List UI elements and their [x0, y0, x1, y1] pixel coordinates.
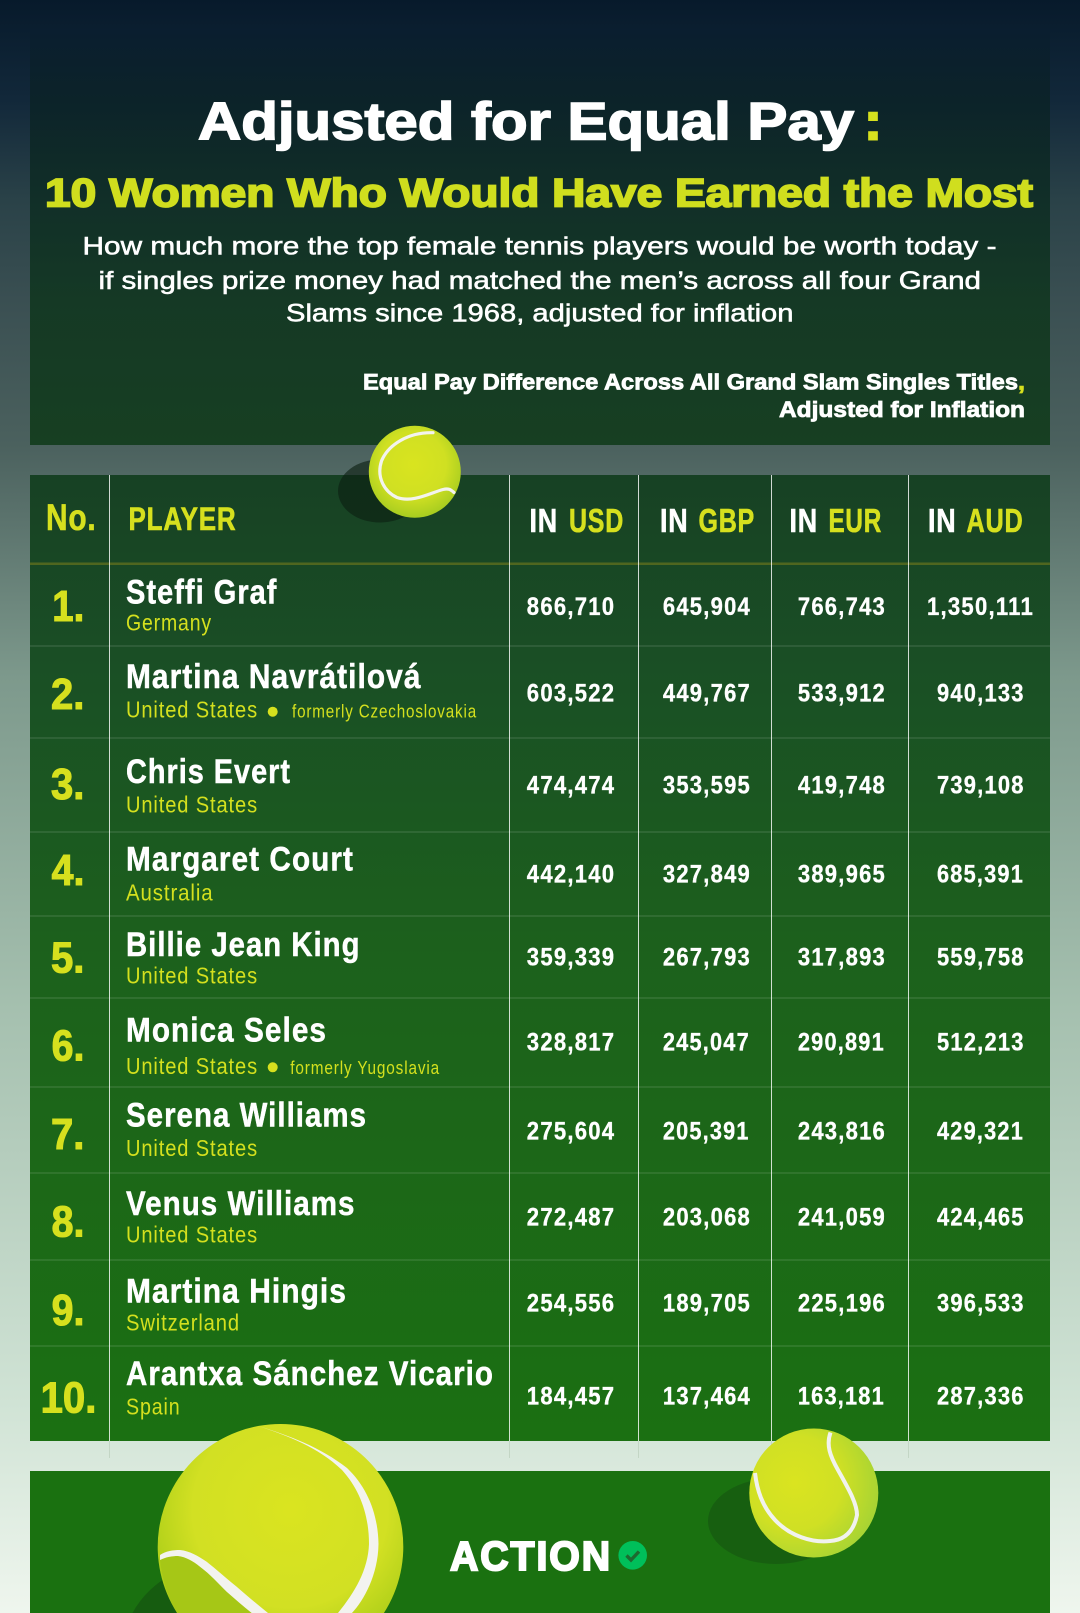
- row 5: Billie Jean King: 559,758: [937, 943, 1025, 971]
- row 4: Margaret Court: 4.: [52, 846, 84, 895]
- row 8: Venus Williams: 424,465: [937, 1204, 1025, 1232]
- row 5: Billie Jean King: Billie Jean King: [126, 926, 360, 964]
- intro text: [82, 232, 997, 328]
- row 8: Venus Williams: Venus Williams: [126, 1185, 356, 1223]
- icon: tennis ball large: [132, 1424, 403, 1613]
- row 2: Martina Navrátilová: 533,912: [798, 679, 886, 707]
- row 8: Venus Williams: 272,487: [527, 1204, 615, 1232]
- row 5: Billie Jean King: 267,793: [663, 943, 751, 971]
- title: Adjusted for Equal Pay: [198, 92, 855, 152]
- row 9: Martina Hingis: 254,556: [527, 1290, 615, 1318]
- row 5: Billie Jean King: [51, 926, 1025, 988]
- row 9: Martina Hingis: Switzerland: [126, 1310, 240, 1336]
- row 6: Monica Seles: [52, 1012, 1025, 1079]
- row 2: Martina Navrátilová: 603,522: [527, 679, 615, 707]
- row 4: Margaret Court: 442,140: [527, 861, 615, 889]
- row 9: Martina Hingis: 225,196: [798, 1290, 886, 1318]
- row 4: Margaret Court: [52, 841, 1024, 906]
- row 2: Martina Navrátilová: United States: [126, 697, 258, 723]
- row 5: Billie Jean King: 359,339: [527, 943, 615, 971]
- row 1: Steffi Graf: 645,904: [663, 593, 751, 621]
- table caption: ,: [1018, 370, 1025, 394]
- row 10: Arantxa Sánchez Vicario: 163,181: [798, 1383, 885, 1411]
- row 4: Margaret Court: Margaret Court: [126, 841, 354, 879]
- table header row: IN: [928, 502, 956, 539]
- table header row: IN: [790, 502, 818, 539]
- row 3: Chris Evert: 474,474: [527, 771, 615, 799]
- table header row: [46, 497, 1024, 539]
- row 7: Serena Williams: 243,816: [798, 1118, 886, 1146]
- row 10: Arantxa Sánchez Vicario: Spain: [126, 1393, 180, 1419]
- row 7: Serena Williams: 7.: [51, 1110, 84, 1159]
- table header row: IN: [660, 502, 688, 539]
- row 6: Monica Seles: 245,047: [663, 1029, 750, 1057]
- row 10: Arantxa Sánchez Vicario: 10.: [41, 1374, 96, 1423]
- table header row: IN: [530, 502, 558, 539]
- row 9: Martina Hingis: [52, 1272, 1025, 1336]
- row 3: Chris Evert: 353,595: [663, 771, 751, 799]
- panel: footer: [30, 1471, 1050, 1613]
- panel: table: [30, 475, 1050, 1458]
- subtitle: 10 Women Who Would Have Earned the Most: [45, 172, 1033, 216]
- row 10: Arantxa Sánchez Vicario: [41, 1355, 1025, 1423]
- row 6: Monica Seles: 328,817: [527, 1029, 615, 1057]
- row 1: Steffi Graf: 866,710: [527, 593, 615, 621]
- row 5: Billie Jean King: 317,893: [798, 943, 886, 971]
- row 6: Monica Seles: formerly Yugoslavia: [290, 1058, 440, 1078]
- row 6: Monica Seles: 512,213: [937, 1029, 1025, 1057]
- row 3: Chris Evert: [51, 753, 1025, 818]
- row 2: Martina Navrátilová: 2.: [51, 670, 84, 719]
- row 3: Chris Evert: United States: [126, 792, 258, 818]
- table header row: PLAYER: [128, 501, 236, 537]
- intro text: How much more the top female tennis players would be worth today -: [82, 232, 997, 260]
- icon: tennis ball right: [708, 1428, 878, 1564]
- row 2: Martina Navrátilová: 449,767: [663, 679, 751, 707]
- brand logo: Action: ACTION: [450, 1533, 612, 1579]
- row 7: Serena Williams: United States: [126, 1135, 258, 1161]
- table header row: EUR: [828, 502, 882, 539]
- row 6: Monica Seles: Monica Seles: [126, 1012, 327, 1050]
- row 5: Billie Jean King: United States: [126, 962, 258, 988]
- row 2: Martina Navrátilová: 940,133: [937, 679, 1025, 707]
- row 8: Venus Williams: 241,059: [798, 1204, 886, 1232]
- intro text: Slams since 1968, adjusted for inflation: [286, 300, 794, 328]
- row 1: Steffi Graf: 1,350,111: [927, 593, 1034, 621]
- row 8: Venus Williams: 8.: [52, 1198, 84, 1247]
- panel: header: [30, 30, 1050, 445]
- row 9: Martina Hingis: 396,533: [937, 1290, 1025, 1318]
- row 1: Steffi Graf: 766,743: [798, 593, 886, 621]
- row 2: Martina Navrátilová: formerly Czechoslovakia: [292, 702, 477, 722]
- row 3: Chris Evert: 739,108: [937, 771, 1025, 799]
- title: :: [864, 92, 882, 152]
- row 3: Chris Evert: 419,748: [798, 771, 886, 799]
- table header row: No.: [46, 497, 96, 538]
- row 7: Serena Williams: 429,321: [937, 1118, 1024, 1146]
- row 10: Arantxa Sánchez Vicario: 287,336: [937, 1383, 1025, 1411]
- row 7: Serena Williams: 275,604: [527, 1118, 615, 1146]
- row 10: Arantxa Sánchez Vicario: 137,464: [663, 1383, 751, 1411]
- row 10: Arantxa Sánchez Vicario: Arantxa Sánchez Vicario: [126, 1355, 494, 1393]
- row 2: Martina Navrátilová: [51, 658, 1025, 723]
- row 9: Martina Hingis: Martina Hingis: [126, 1272, 347, 1310]
- row 6: Monica Seles: 290,891: [798, 1029, 885, 1057]
- row 1: Steffi Graf: [52, 574, 1034, 636]
- row 6: Monica Seles: United States: [126, 1053, 258, 1079]
- table header row: AUD: [966, 502, 1024, 539]
- row 2: Martina Navrátilová: Martina Navrátilová: [126, 658, 422, 696]
- row 8: Venus Williams: 203,068: [663, 1204, 751, 1232]
- row 1: Steffi Graf: 1.: [52, 582, 84, 631]
- row 6: Monica Seles: 6.: [52, 1022, 84, 1071]
- table caption: Adjusted for Inflation: [779, 397, 1025, 422]
- row 1: Steffi Graf: Germany: [126, 610, 212, 636]
- table caption: [363, 370, 1025, 422]
- intro text: if singles prize money had matched the men’s across all four Grand: [98, 267, 981, 295]
- row 9: Martina Hingis: 9.: [52, 1286, 84, 1335]
- row 8: Venus Williams: [52, 1185, 1025, 1248]
- icon: tennis ball top: [338, 426, 461, 522]
- table header row: GBP: [698, 502, 755, 539]
- row 7: Serena Williams: Serena Williams: [126, 1097, 367, 1135]
- row 7: Serena Williams: 205,391: [663, 1118, 750, 1146]
- row 4: Margaret Court: 327,849: [663, 861, 751, 889]
- row 8: Venus Williams: United States: [126, 1222, 258, 1248]
- row 7: Serena Williams: [51, 1097, 1024, 1161]
- row 4: Margaret Court: 685,391: [937, 861, 1024, 889]
- row 9: Martina Hingis: 189,705: [663, 1290, 751, 1318]
- row 4: Margaret Court: 389,965: [798, 861, 886, 889]
- row 1: Steffi Graf: Steffi Graf: [126, 574, 278, 612]
- row 10: Arantxa Sánchez Vicario: 184,457: [527, 1383, 615, 1411]
- row 4: Margaret Court: Australia: [126, 880, 214, 906]
- row 5: Billie Jean King: 5.: [51, 934, 84, 983]
- table header row: USD: [569, 502, 624, 539]
- table caption: Equal Pay Difference Across All Grand Slam Singles Titles: [363, 370, 1018, 394]
- row 3: Chris Evert: 3.: [51, 760, 84, 809]
- row 3: Chris Evert: Chris Evert: [126, 753, 291, 791]
